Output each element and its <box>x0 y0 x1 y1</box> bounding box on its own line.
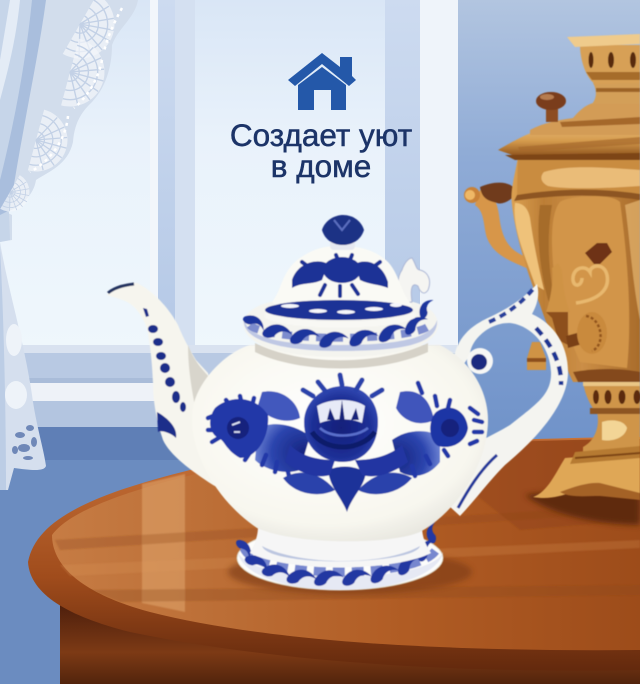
right leaves and rose <box>392 383 482 476</box>
samovar ornament <box>573 243 612 303</box>
curtain <box>0 0 138 490</box>
samovar neck <box>592 83 640 104</box>
window sill <box>0 345 458 684</box>
lid finial <box>398 258 430 303</box>
central rose <box>303 375 382 462</box>
table rim <box>28 437 640 671</box>
teapot foot <box>235 520 443 590</box>
teapot body <box>192 345 488 541</box>
samovar handle <box>464 183 535 272</box>
teapot handle <box>445 284 568 516</box>
flower ornament <box>208 375 482 512</box>
foot band pattern <box>235 520 442 589</box>
samovar body <box>512 157 640 382</box>
samovar vent ring <box>583 381 640 414</box>
caption <box>230 117 412 184</box>
samovar knob <box>536 92 566 122</box>
lower leaves <box>283 445 412 512</box>
teapot shadow <box>228 550 472 594</box>
icon: home <box>288 53 356 110</box>
caption line 2: в доме <box>271 148 371 184</box>
upper lace curtain <box>0 0 138 242</box>
samovar lid <box>530 101 640 135</box>
caption line 1: Создает уют <box>230 117 412 153</box>
samovar wide rim <box>498 122 640 160</box>
samovar crown <box>567 34 640 84</box>
samovar shadow <box>525 488 640 525</box>
lid <box>265 246 415 328</box>
left leaves and rose <box>208 391 310 480</box>
lid knob <box>322 215 364 250</box>
window glass background <box>0 0 460 350</box>
lower lace curtain <box>0 242 46 490</box>
collar <box>242 297 438 368</box>
samovar tap <box>527 263 607 370</box>
samovar base foot <box>533 412 640 500</box>
teapot spout <box>107 283 240 500</box>
samovar <box>464 34 640 500</box>
table lower base <box>60 605 640 684</box>
window frames <box>150 0 458 350</box>
lid flower ornament <box>292 255 388 296</box>
table <box>28 437 640 684</box>
wall <box>458 0 640 450</box>
teapot <box>107 215 568 590</box>
table surface <box>52 439 640 650</box>
surface reflections <box>55 440 640 612</box>
